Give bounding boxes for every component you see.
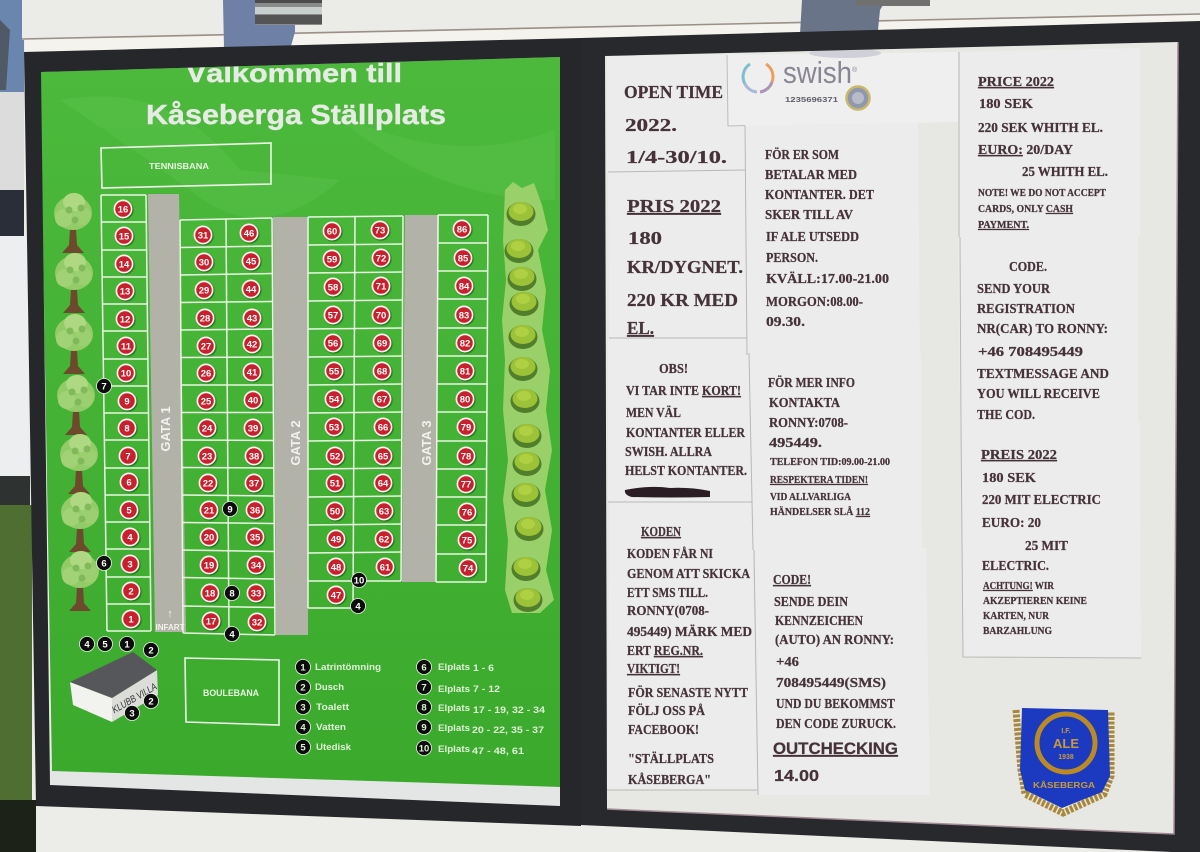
icon: IF Ale pennant <box>1016 708 1111 813</box>
note: code german and outchecking: +46 <box>776 654 799 669</box>
numbered pitches, row 2: 36 <box>250 505 260 516</box>
numbered pitches, row 4: 86 <box>457 224 467 235</box>
numbered pitches, row 1: 2 <box>128 586 134 597</box>
note: code german and outchecking: 708495449(SMS) <box>776 675 886 690</box>
note: koden: GENOM ATT SKICKA <box>627 566 750 581</box>
numbered pitches, row 3: 70 <box>376 310 386 321</box>
road: Gata 2: GATA 2 <box>288 420 303 466</box>
road: Gata 1: ↑ <box>167 608 173 620</box>
legend: services: Utedisk <box>316 742 352 753</box>
note: price english: EURO: 20/DAY <box>978 142 1073 157</box>
numbered pitches, row 2: 19 <box>204 560 214 571</box>
note: more info: 495449. <box>769 435 822 450</box>
numbered pitches, row 1 <box>114 200 140 628</box>
tennis court: TENNISBANA <box>149 161 209 171</box>
numbered pitches, row 4: 79 <box>461 422 471 433</box>
note: obs: OBS! <box>659 361 688 376</box>
building badges: 2 <box>148 646 154 656</box>
numbered pitches, row 1: 12 <box>120 314 130 325</box>
numbered pitches, row 2: 46 <box>244 228 254 239</box>
numbered pitches, row 3: 63 <box>379 506 389 517</box>
note: preis german: KARTEN, NUR <box>983 611 1050 622</box>
numbered pitches, row 3: 68 <box>377 366 387 377</box>
note: code german and outchecking: UND DU BEKOMMST <box>776 696 895 711</box>
icon: IF Ale pennant: 1938 <box>1058 754 1074 761</box>
note: price english: 180 SEK <box>979 96 1034 111</box>
numbered pitches, row 1: 6 <box>126 477 132 488</box>
numbered pitches, row 3: 52 <box>330 451 340 462</box>
numbered pitches, row 2: 18 <box>205 588 215 599</box>
numbered pitches, row 1: 4 <box>127 532 133 543</box>
service point badges on the map: 9 <box>227 504 233 516</box>
note: koden: FÖLJ OSS PÅ <box>628 703 705 718</box>
numbered pitches, row 4: 74 <box>463 563 474 574</box>
note: cash payment hours: 09.30. <box>766 314 805 329</box>
legend: electric pitches <box>416 660 546 757</box>
note: koden: 495449) MÄRK MED <box>627 624 752 639</box>
numbered pitches, row 3: 51 <box>330 478 341 489</box>
numbered pitches, row 1: 15 <box>119 231 130 242</box>
icon: swish logo ring <box>743 64 773 92</box>
numbered pitches, row 3: 62 <box>379 534 389 545</box>
numbered pitches, row 1: 13 <box>120 286 130 297</box>
note: cash payment hours: FÖR ER SOM <box>765 147 839 162</box>
road: Gata 1: INFART <box>156 623 185 632</box>
building badges: 3 <box>129 708 135 720</box>
icon: IF Ale pennant: KÅSEBERGA <box>1033 781 1095 790</box>
legend: electric pitches: Elplats <box>438 703 470 714</box>
note: more info: RESPEKTERA TIDEN! <box>770 475 868 486</box>
numbered pitches, row 4: 75 <box>462 535 473 546</box>
numbered pitches, row 2: 39 <box>248 423 258 434</box>
numbered pitches, row 3: 72 <box>376 253 386 264</box>
icon: IF Ale pennant: ALE <box>1053 736 1079 751</box>
legend: electric pitches: 7 - 12 <box>473 684 500 695</box>
numbered pitches, row 2: 37 <box>249 478 259 489</box>
note: koden: KÅSEBERGA" <box>628 772 711 787</box>
note: pris 2022: 220 KR MED <box>627 290 738 310</box>
numbered pitches, row 1: 11 <box>121 341 132 352</box>
note: more info: FÖR MER INFO <box>768 375 855 390</box>
note: code german and outchecking: OUTCHECKING <box>773 739 898 758</box>
legend: electric pitches: 20 - 22, 35 - 37 <box>472 725 544 736</box>
note: obs <box>625 361 747 478</box>
swish payment card: 1235696371 <box>785 95 838 104</box>
redacted marker blot <box>625 487 710 498</box>
note: code english: NR(CAR) TO RONNY: <box>977 321 1108 336</box>
building badges <box>80 636 158 720</box>
numbered pitches, row 2: 38 <box>249 451 259 462</box>
numbered pitches, row 2: 24 <box>202 423 213 434</box>
legend: services: Toalett <box>316 702 350 713</box>
numbered pitches, row 2: 25 <box>201 396 212 407</box>
poster reflections <box>60 96 555 218</box>
tennis court <box>101 143 271 188</box>
note: price english <box>978 74 1108 231</box>
numbered pitches, row 3: 60 <box>327 226 337 237</box>
note: more info <box>768 375 890 518</box>
numbered pitches, row 4: 82 <box>460 338 470 349</box>
note: code german and outchecking: CODE! <box>773 572 811 587</box>
numbered pitches, row 3: 65 <box>378 451 389 462</box>
swish payment card: swish <box>783 55 852 90</box>
numbered pitches, row 3: 56 <box>328 338 338 349</box>
note: cash payment hours: KVÄLL:17.00-21.00 <box>766 271 889 286</box>
note: preis german: BARZAHLUNG <box>983 626 1052 637</box>
building badges: 5 <box>102 640 108 650</box>
note paper sheets <box>607 48 1141 795</box>
road: Gata 1: GATA 1 <box>158 406 173 452</box>
left poster frame <box>24 38 581 826</box>
numbered pitches, row 2: 34 <box>251 560 262 571</box>
legend: electric pitches: Elplats <box>438 723 470 734</box>
note: koden: "STÄLLPLATS <box>628 751 714 766</box>
note: code english: +46 708495449 <box>978 344 1083 359</box>
service point badges on the map: 7 <box>101 382 107 392</box>
note: cash payment hours <box>765 147 889 329</box>
board inner edge <box>607 42 1178 834</box>
legend: electric pitches: 17 - 19, 32 - 34 <box>473 705 546 716</box>
note: price english: PRICE 2022 <box>978 74 1054 89</box>
title: Välkommen till <box>186 58 402 88</box>
numbered pitches, row 2: 41 <box>247 367 258 378</box>
note: cash payment hours: IF ALE UTSEDD <box>766 229 859 244</box>
numbered pitches, row 2: 29 <box>199 285 209 296</box>
legend: services: Dusch <box>315 682 344 693</box>
bushes along the right edge <box>502 182 554 613</box>
note: cash payment hours: BETALAR MED <box>765 167 857 182</box>
legend: electric pitches: Elplats <box>438 662 470 673</box>
note: more info: KONTAKTA <box>769 395 840 410</box>
legend: services: 5 <box>300 742 306 754</box>
numbered pitches, row 4: 80 <box>460 394 470 405</box>
note: preis german: AKZEPTIEREN KEINE <box>983 596 1087 607</box>
numbered pitches, row 3: 50 <box>330 506 340 517</box>
note: koden: FACEBOOK! <box>628 722 699 737</box>
service point badges on the map: 4 <box>229 630 235 640</box>
legend: services: 2 <box>300 682 306 694</box>
note: koden: ETT SMS TILL. <box>627 585 708 600</box>
note: koden: FÖR SENASTE NYTT <box>628 685 748 700</box>
numbered pitches, row 1: 16 <box>118 204 128 215</box>
note: open time: 1/4-30/10. <box>626 147 727 167</box>
note: preis german <box>981 447 1101 637</box>
mounting clamp right <box>800 0 930 34</box>
note: cash payment hours: KONTANTER. DET <box>765 187 874 202</box>
note: koden: VIKTIGT! <box>627 661 680 676</box>
numbered pitches, row 4: 85 <box>458 253 469 264</box>
legend: electric pitches: 6 <box>421 662 427 674</box>
note: pris 2022: EL. <box>627 318 654 338</box>
note: koden: KODEN <box>641 524 681 539</box>
note: code english: SEND YOUR <box>977 281 1050 296</box>
boule court <box>185 658 279 725</box>
numbered pitches, row 3: 54 <box>329 394 340 405</box>
note: obs: VI TAR INTE KORT! <box>626 383 741 398</box>
building badges: 1 <box>124 640 130 650</box>
legend: services: Vatten <box>316 722 346 733</box>
numbered pitches, row 4 <box>453 220 477 577</box>
note: pris 2022: KR/DYGNET. <box>627 257 743 277</box>
numbered pitches, row 4: 84 <box>459 281 470 292</box>
legend: electric pitches: Elplats <box>438 684 470 695</box>
numbered pitches, row 3: 57 <box>328 310 338 321</box>
numbered pitches, row 2: 17 <box>206 616 216 627</box>
note: code german and outchecking: SENDE DEIN <box>774 594 848 609</box>
numbered pitches, row 2: 21 <box>204 505 215 516</box>
numbered pitches, row 3: 69 <box>377 338 387 349</box>
numbered pitches, row 1: 10 <box>121 368 131 379</box>
trees along the left edge <box>54 193 99 611</box>
note: price english: 220 SEK WHITH EL. <box>978 120 1103 135</box>
swish payment card <box>727 48 958 126</box>
parking grid lines <box>101 195 488 635</box>
numbered pitches, row 2: 26 <box>201 368 211 379</box>
numbered pitches, row 1: 9 <box>124 396 130 407</box>
service point badges on the map: 8 <box>229 588 235 600</box>
note: price english: NOTE! WE DO NOT ACCEPT <box>978 188 1106 199</box>
numbered pitches, row 3: 59 <box>327 254 337 265</box>
numbered pitches, row 2: 22 <box>203 478 213 489</box>
numbered pitches, row 2 <box>194 224 266 631</box>
service point badges on the map: 4 <box>355 602 361 612</box>
note: open time: 2022. <box>625 115 677 135</box>
note: pris 2022: PRIS 2022 <box>627 196 721 216</box>
note: code german and outchecking: 14.00 <box>774 768 819 785</box>
numbered pitches, row 3: 48 <box>331 562 341 573</box>
note: code english: CODE. <box>1009 259 1047 274</box>
building badges: 4 <box>84 640 90 650</box>
panel: campsite map poster <box>40 57 561 810</box>
numbered pitches, row 2: 40 <box>248 395 258 406</box>
note: code english: THE COD. <box>977 407 1035 422</box>
note: more info: TELEFON TID:09.00-21.00 <box>770 457 890 468</box>
board background <box>603 41 1180 836</box>
numbered pitches, row 2: 27 <box>201 341 211 352</box>
service point badges on the map: 6 <box>101 558 107 570</box>
note: code german and outchecking: DEN CODE ZURUCK. <box>776 716 896 731</box>
numbered pitches, row 4: 77 <box>461 479 471 490</box>
note: preis german: ELECTRIC. <box>982 558 1049 573</box>
numbered pitches, row 2: 35 <box>250 532 261 543</box>
numbered pitches, row 3: 61 <box>380 562 391 573</box>
numbered pitches, row 2: 20 <box>204 532 214 543</box>
note: code english: YOU WILL RECEIVE <box>977 386 1100 401</box>
legend: electric pitches: Elplats <box>438 744 470 755</box>
numbered pitches, row 2: 45 <box>246 256 257 267</box>
numbered pitches, row 1: 8 <box>124 423 130 434</box>
mounting clamp left <box>223 0 322 48</box>
note: code german and outchecking <box>773 572 898 785</box>
numbered pitches, row 2: 43 <box>247 313 257 324</box>
numbered pitches, row 3: 53 <box>329 422 339 433</box>
note: code english: REGISTRATION <box>977 301 1075 316</box>
service point badges on the map: 10 <box>354 576 364 586</box>
numbered pitches, row 3: 73 <box>375 225 385 236</box>
legend: electric pitches: 10 <box>419 744 429 754</box>
note: preis german: 25 MIT <box>1025 538 1068 553</box>
service point badges on the map <box>96 378 366 642</box>
numbered pitches, row 3: 55 <box>329 366 340 377</box>
numbered pitches, row 3: 66 <box>378 422 388 433</box>
note: pris 2022: 180 <box>628 228 662 248</box>
note: code german and outchecking: KENNZEICHEN <box>775 613 863 628</box>
numbered pitches, row 2: 33 <box>251 588 261 599</box>
legend: electric pitches: 9 <box>421 722 427 734</box>
club house building <box>70 652 159 722</box>
numbered pitches, row 4: 83 <box>459 310 469 321</box>
legend: electric pitches: 7 <box>421 682 427 694</box>
title: Kåseberga Ställplats <box>146 99 446 130</box>
numbered pitches, row 2: 42 <box>247 339 257 350</box>
note: cash payment hours: SKER TILL AV <box>765 207 853 222</box>
note: price english: PAYMENT. <box>978 220 1029 231</box>
numbered pitches, row 2: 23 <box>202 451 212 462</box>
note: price english: CARDS, ONLY CASH <box>978 204 1073 215</box>
note: open time <box>624 82 727 167</box>
note: obs: SWISH. ALLRA <box>625 444 712 459</box>
building badges: 2 <box>148 696 154 708</box>
legend: electric pitches: 1 - 6 <box>473 663 494 674</box>
note: code english: TEXTMESSAGE AND <box>977 366 1109 381</box>
numbered pitches, row 2: 32 <box>252 617 262 628</box>
numbered pitches, row 2: 44 <box>246 284 257 295</box>
note: code english <box>977 259 1109 422</box>
numbered pitches, row 3: 49 <box>331 534 341 545</box>
note: cash payment hours: MORGON:08.00- <box>766 294 863 309</box>
note: preis german: 180 SEK <box>982 470 1037 485</box>
note: code german and outchecking: (AUTO) AN RONNY: <box>775 632 894 647</box>
road: Gata 3 <box>402 215 439 582</box>
title <box>146 58 446 130</box>
note: price english: 25 WHITH EL. <box>1022 164 1108 179</box>
road: Gata 2 <box>273 217 308 635</box>
poster white strip <box>50 760 561 810</box>
note paper edges <box>607 52 1141 795</box>
boule court: BOULEBANA <box>203 688 259 698</box>
numbered pitches, row 1: 5 <box>126 505 132 516</box>
legend: services: Latrintömning <box>315 662 381 673</box>
legend: electric pitches: 47 - 48, 61 <box>472 746 525 757</box>
note: obs: HELST KONTANTER. <box>625 463 747 478</box>
legend: services: 1 <box>300 662 306 674</box>
road: Gata 3: GATA 3 <box>419 420 434 466</box>
icon: club seal <box>846 86 870 110</box>
note: more info: HÄNDELSER SLÅ 112 <box>770 505 870 518</box>
note: obs: KONTANTER ELLER <box>626 425 745 440</box>
note: preis german: 220 MIT ELECTRIC <box>982 492 1101 507</box>
legend: services: 4 <box>300 722 306 734</box>
panel: notice board <box>603 41 1180 836</box>
numbered pitches, row 4: 76 <box>462 507 472 518</box>
numbered pitches, row 3: 71 <box>376 281 387 292</box>
numbered pitches, row 4: 78 <box>461 451 471 462</box>
club house building: KLUBB VILLA <box>110 681 159 716</box>
note: koden: RONNY(0708- <box>627 603 709 618</box>
note: koden: ERT REG.NR. <box>627 643 703 658</box>
note: koden <box>627 524 752 787</box>
legend: services: 3 <box>300 702 306 714</box>
note: open time: OPEN TIME <box>624 82 723 102</box>
road: Gata 1 <box>148 194 186 632</box>
numbered pitches, row 2: 31 <box>198 230 209 241</box>
numbered pitches, row 3 <box>323 221 394 604</box>
numbered pitches, row 2: 30 <box>199 257 209 268</box>
note: obs: MEN VÄL <box>626 405 681 420</box>
note: pris 2022 <box>627 196 743 338</box>
numbered pitches, row 1: 1 <box>128 614 134 625</box>
note: preis german: EURO: 20 <box>982 515 1041 530</box>
numbered pitches, row 3: 67 <box>377 394 387 405</box>
numbered pitches, row 1: 3 <box>127 559 133 570</box>
numbered pitches, row 2: 28 <box>200 313 210 324</box>
legend: electric pitches: 8 <box>421 702 427 714</box>
note: cash payment hours: PERSON. <box>766 250 818 265</box>
icon: IF Ale pennant: I.F. <box>1061 728 1071 735</box>
numbered pitches, row 3: 64 <box>378 478 389 489</box>
numbered pitches, row 3: 47 <box>331 590 341 601</box>
numbered pitches, row 1: 14 <box>119 259 130 270</box>
note: more info: VID ALLVARLIGA <box>770 492 852 503</box>
right board frame <box>581 21 1200 852</box>
numbered pitches, row 1: 7 <box>125 451 131 462</box>
note: more info: RONNY:0708- <box>769 415 848 430</box>
numbered pitches, row 4: 81 <box>460 366 471 377</box>
note: koden: KODEN FÅR NI <box>627 546 713 561</box>
note: preis german: PREIS 2022 <box>981 447 1057 462</box>
note: preis german: ACHTUNG! WIR <box>983 581 1055 592</box>
swish payment card: ® <box>852 66 858 74</box>
numbered pitches, row 3: 58 <box>328 282 338 293</box>
poster green background <box>40 57 561 787</box>
legend: services <box>296 660 381 754</box>
